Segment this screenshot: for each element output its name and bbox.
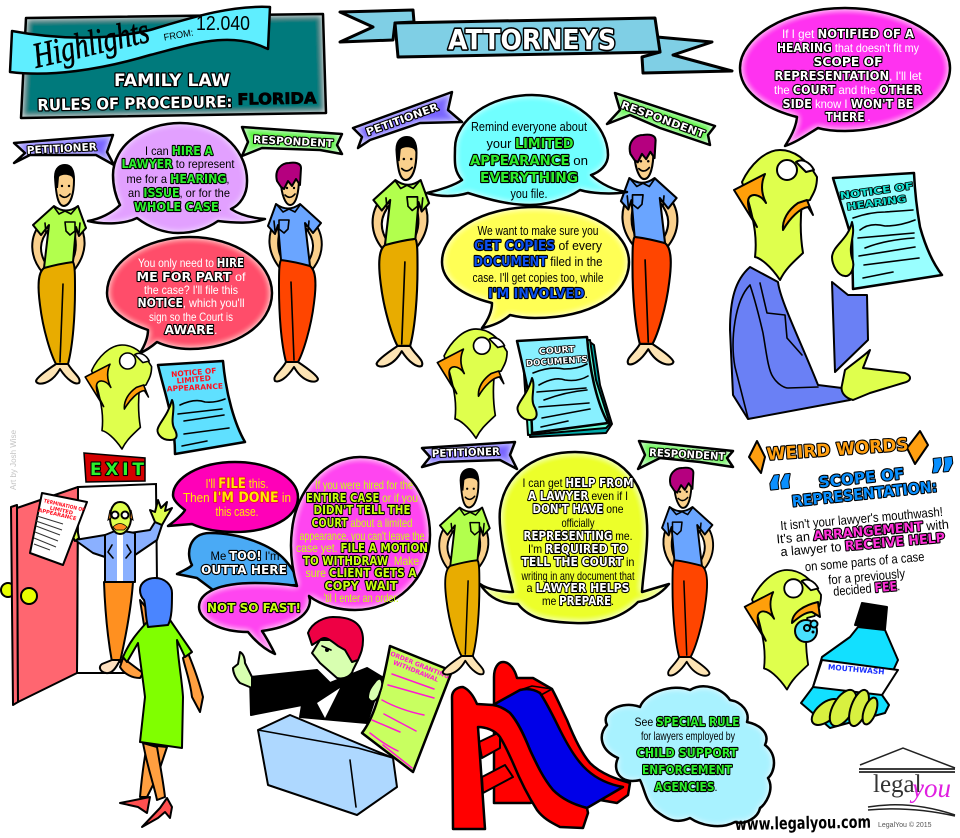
figure: lawyer in suit — [730, 150, 910, 419]
cloud callout: special rule: ENFORCEMENT — [642, 763, 733, 777]
speech bubble: hire a lawyer: WHOLE CASE. — [134, 200, 222, 214]
speech bubble: limited appearance: Remind everyone about — [471, 119, 587, 134]
heading: scope of representation: SCOPE OF — [818, 465, 905, 491]
speech bubble: get copies: We want to make sure you — [478, 223, 598, 238]
speech bubble: hire me for part: NOTICE, which you'll — [138, 296, 244, 310]
speech bubble: help from a lawyer: I can get HELP FROM — [522, 476, 634, 490]
label: respondent ribbon — [242, 127, 342, 156]
speech bubble: help from a lawyer: I'm REQUIRED TO — [528, 542, 628, 556]
heading: weird words — [749, 431, 928, 473]
speech bubble: i'll file this: this case. — [216, 504, 258, 519]
speech bubble: file a motion: TO WITHDRAW. Make — [303, 554, 419, 568]
speech bubble: help from a lawyer: TELL THE COURT in — [522, 555, 634, 569]
cloud callout: special rule: CHILD SUPPORT — [636, 746, 738, 760]
speech bubble: get copies: case. I'll get copies too, while — [472, 270, 604, 285]
heading: rules of procedure: RULES OF PROCEDURE: — [37, 93, 233, 114]
speech bubble: get copies: I'M INVOLVED. — [488, 286, 588, 302]
document: notice of hearing: NOTICE OF — [839, 181, 914, 202]
speech bubble: get copies: GET COPIES of every — [474, 238, 602, 254]
cloud callout: special rule — [602, 686, 774, 826]
document: notice of hearing: HEARING — [846, 194, 907, 213]
figure: petitioner — [373, 137, 429, 367]
figure: petitioner — [32, 165, 86, 384]
document: notice of limited appearance: NOTICE OF — [171, 366, 217, 379]
speech bubble: file a motion: If you were hired for the — [315, 478, 413, 492]
label: respondent ribbon: RESPONDENT — [619, 99, 707, 141]
label: petitioner ribbon — [353, 92, 462, 148]
speech bubble: get copies — [442, 207, 629, 328]
speech bubble: limited appearance: you file. — [510, 186, 548, 201]
definition text: decided FEE. — [833, 578, 901, 600]
label: respondent ribbon: RESPONDENT — [253, 134, 334, 150]
speech bubble: me too — [177, 533, 297, 590]
speech bubble: file a motion: NOT SO FAST! — [207, 601, 301, 615]
document: notice of limited appearance — [158, 361, 245, 454]
panel: exit scene — [1, 453, 452, 827]
credit: art by: Art by Josh Wise — [9, 429, 18, 490]
cloud callout: special rule: See SPECIAL RULE — [634, 715, 740, 729]
figure: judge at bench — [233, 617, 397, 815]
speech bubble: file a motion: case yet. FILE A MOTION — [296, 541, 428, 555]
speech bubble: hire a lawyer: I can HIRE A — [145, 144, 214, 158]
banner: attorneys: ATTORNEYS — [448, 23, 616, 56]
label: respondent ribbon — [638, 441, 733, 469]
speech bubble: limited appearance: your LIMITED — [486, 136, 574, 152]
panel: notice of hearing — [730, 8, 950, 419]
logo: legal you: legal — [873, 771, 922, 798]
logo: legal you: LegalYou © 2015 — [878, 821, 932, 829]
label: petitioner ribbon: PETITIONER — [432, 446, 500, 460]
label: respondent ribbon — [607, 93, 715, 145]
speech bubble: won't be there: SIDE know I WON'T BE — [782, 97, 914, 111]
speech bubble: hire a lawyer — [88, 123, 265, 233]
document: termination of limited appearance: TERMINATION OF — [43, 498, 86, 514]
label: respondent ribbon: RESPONDENT — [649, 447, 726, 463]
definition text: a lawyer to RECEIVE HELP — [780, 530, 946, 560]
speech bubble: won't be there — [740, 8, 950, 146]
definition text: It's an ARRANGEMENT with — [776, 517, 950, 548]
document: order granting withdrawal — [362, 646, 452, 772]
figure: lawyer head — [437, 329, 507, 438]
figure: petitioner — [439, 469, 490, 675]
ribbon: highlights from 12.040: FROM: — [163, 28, 194, 44]
speech bubble: file a motion: appearance, you can't leave the — [300, 529, 425, 543]
speech bubble: hire me for part: the case? I'll file this — [144, 283, 238, 297]
speech bubble: file a motion: DIDN'T TELL THE — [314, 503, 410, 517]
speech bubble: hire me for part: AWARE. — [164, 323, 218, 337]
speech bubble: help from a lawyer: REPRESENTING me. — [524, 529, 632, 543]
speech bubble: hire me for part: sign so the Court is — [149, 310, 233, 324]
door — [1, 487, 78, 705]
speech bubble: file a motion — [199, 457, 430, 654]
speech bubble: won't be there: If I get NOTIFIED OF A — [782, 27, 915, 41]
figure: respondent — [662, 468, 713, 676]
speech bubble: help from a lawyer: writing in any document that — [521, 569, 635, 583]
speech bubble: me too: OUTTA HERE — [201, 563, 287, 577]
sign: exit — [84, 453, 145, 482]
title block: highlights — [10, 7, 326, 118]
speech bubble: limited appearance: EVERYTHING — [480, 171, 578, 186]
speech bubble: help from a lawyer: me PREPARE. — [542, 594, 614, 608]
ribbon: highlights from 12.040: Highlights — [28, 10, 153, 76]
illustration: mouthwash bottle: MOUTHWASH — [828, 663, 885, 676]
definition text — [776, 504, 950, 600]
banner: attorneys — [340, 10, 732, 73]
definition text: on some parts of a case — [804, 549, 925, 574]
cloud callout: special rule: AGENCIES. — [654, 780, 718, 794]
panel: weird words — [745, 431, 960, 730]
speech bubble: help from a lawyer — [480, 452, 669, 623]
speech bubble: get copies: DOCUMENT filed in the — [474, 254, 602, 270]
speech bubble: me too: Me TOO! I'm — [210, 549, 280, 563]
document: termination of limited appearance: APPEARANCE — [38, 508, 77, 522]
speech bubble: hire a lawyer: LAWYER to represent — [122, 157, 235, 171]
logo: legal you: you — [909, 773, 951, 803]
heading: scope of representation: “ — [764, 466, 798, 519]
document: court documents: COURT — [539, 345, 575, 357]
speech bubble: i'll file this — [168, 462, 298, 532]
heading: scope of representation — [764, 449, 960, 519]
speech bubble: file a motion: 'til I enter an order. — [324, 591, 398, 605]
speech bubble: won't be there: HEARING that doesn't fit my — [777, 41, 919, 55]
document: notice of limited appearance: LIMITED — [176, 374, 211, 385]
speech bubble: file a motion: sure CLIENT GETS A — [306, 566, 417, 580]
speech bubble: file a motion: ENTIRE CASE or if you — [306, 491, 418, 505]
speech bubble: hire a lawyer: an ISSUE, or for the — [128, 186, 230, 200]
website url: www.legalyou.com — [735, 813, 871, 835]
ribbon: highlights from 12.040 — [10, 7, 270, 76]
label: petitioner ribbon — [422, 442, 517, 469]
panel: help from a lawyer — [422, 441, 733, 676]
document: notice of hearing — [832, 173, 942, 289]
document: termination of limited appearance: LIMITED — [49, 505, 74, 517]
panel: limited appearance reminder — [353, 92, 715, 438]
document: notice of limited appearance: APPEARANCE — [167, 382, 223, 393]
figure: lawyer head — [85, 345, 152, 449]
document: termination of limited appearance — [30, 493, 87, 565]
speech bubble: hire me for part: You only need to HIRE — [138, 256, 244, 270]
figure: attorney leaving — [70, 500, 172, 673]
speech bubble: help from a lawyer: A LAWYER even if I — [528, 489, 628, 503]
illustration: mouthwash bottle — [801, 603, 898, 730]
speech bubble: limited appearance — [427, 95, 627, 205]
speech bubble: limited appearance: APPEARANCE on — [470, 153, 588, 169]
cloud callout: special rule: for lawyers employed by — [641, 729, 735, 743]
logo: legal you — [859, 748, 955, 829]
label: petitioner ribbon: PETITIONER — [365, 101, 440, 139]
speech bubble: help from a lawyer: a LAWYER HELPS — [526, 581, 630, 595]
speech bubble: hire a lawyer: me for a HEARING, — [126, 172, 230, 186]
speech bubble: won't be there: the COURT and the OTHER — [774, 83, 922, 97]
panel: teal title box — [21, 14, 326, 118]
speech bubble: file a motion: COURT about a limited — [312, 516, 412, 530]
speech bubble: won't be there: SCOPE OF — [814, 55, 882, 69]
definition text: for a previously — [828, 566, 906, 587]
ribbon: highlights from 12.040: 12.040 — [196, 13, 250, 35]
speech bubble: file a motion: COPY. WAIT — [324, 579, 398, 593]
speech bubble: won't be there: REPRESENTATION, I'll let — [774, 69, 922, 83]
heading: florida: FLORIDA — [237, 89, 317, 109]
document: order granting withdrawal: ORDER GRANTING — [389, 651, 450, 681]
speech bubble: won't be there: THERE . — [826, 110, 870, 124]
document: court documents — [517, 337, 612, 437]
heading: scope of representation: ” — [927, 449, 960, 502]
sign: exit: EXIT — [90, 460, 144, 480]
figure: respondent — [268, 163, 322, 382]
figure: lawyer with mouthwash — [745, 570, 821, 690]
document: court documents: DOCUMENTS — [526, 355, 588, 369]
label: petitioner ribbon: PETITIONER — [27, 141, 97, 157]
speech bubble: hire me for part — [107, 237, 272, 353]
speech bubble: i'll file this: I'll FILE this. — [206, 476, 268, 492]
doorway — [77, 484, 157, 673]
heading: family law: FAMILY LAW — [114, 71, 230, 91]
illustration: red and blue slide — [452, 662, 630, 829]
speech bubble: help from a lawyer: DON'T HAVE one — [532, 502, 624, 516]
label: petitioner ribbon — [14, 135, 114, 165]
heading: weird words: WEIRD WORDS — [766, 435, 909, 465]
speech bubble: hire me for part: ME FOR PART of — [136, 270, 246, 284]
heading: scope of representation: REPRESENTATION: — [791, 477, 938, 511]
speech bubble: help from a lawyer: officially — [562, 516, 594, 530]
document: order granting withdrawal: WITHDRAWAL — [392, 659, 439, 684]
speech bubble: i'll file this: Then I'M DONE in — [183, 490, 291, 506]
figure: respondent — [621, 135, 677, 365]
panel: hiring a lawyer — [14, 123, 342, 454]
figure: woman walking — [120, 578, 203, 827]
